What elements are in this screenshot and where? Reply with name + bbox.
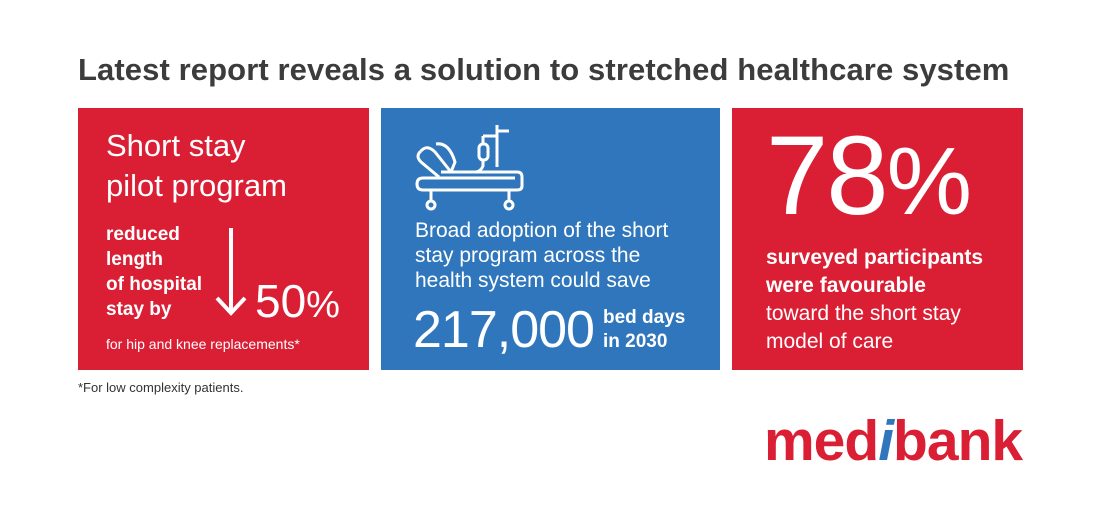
text block: reduced bbox=[106, 224, 202, 320]
note: for hip and knee replacements* bbox=[106, 336, 300, 352]
panel: bed days bbox=[381, 108, 720, 370]
stat: 50%: 50% bbox=[255, 275, 340, 327]
panel: short stay pilot bbox=[78, 108, 369, 370]
text block: reduced: length bbox=[106, 249, 163, 270]
heading bbox=[106, 128, 287, 203]
stat: 217,000: 217,000 bbox=[413, 301, 594, 359]
stat label: bed days bbox=[603, 307, 685, 328]
heading: pilot program bbox=[106, 168, 287, 203]
text block: reduced: of hospital bbox=[106, 274, 202, 295]
text block: Broad adoption of the short bbox=[415, 219, 668, 242]
footnote: *For low complexity patients. bbox=[78, 380, 243, 395]
stat: 78%: 78% bbox=[766, 113, 972, 238]
icon: hospital bed bbox=[416, 125, 524, 210]
text block bbox=[766, 246, 983, 353]
panel: 78% bbox=[732, 108, 1023, 370]
text block: health system could save bbox=[415, 269, 651, 292]
text block: surveyed participants bbox=[766, 246, 983, 269]
text block: were favourable bbox=[766, 274, 926, 297]
heading: Short stay bbox=[106, 128, 246, 163]
text block: toward the short stay bbox=[766, 302, 961, 325]
logo: medibank: medibank bbox=[764, 409, 1022, 473]
text block: model of care bbox=[766, 330, 893, 353]
stat label bbox=[603, 307, 685, 352]
text block: reduced: stay by bbox=[106, 299, 171, 320]
title: Latest report reveals a solution to stretched healthcare system bbox=[78, 52, 1009, 87]
stat label: in 2030 bbox=[603, 331, 667, 352]
text block: stay program across the bbox=[415, 244, 640, 267]
text block: reduced: reduced bbox=[106, 224, 180, 245]
icon: down arrow bbox=[216, 228, 246, 316]
text block bbox=[415, 219, 668, 292]
